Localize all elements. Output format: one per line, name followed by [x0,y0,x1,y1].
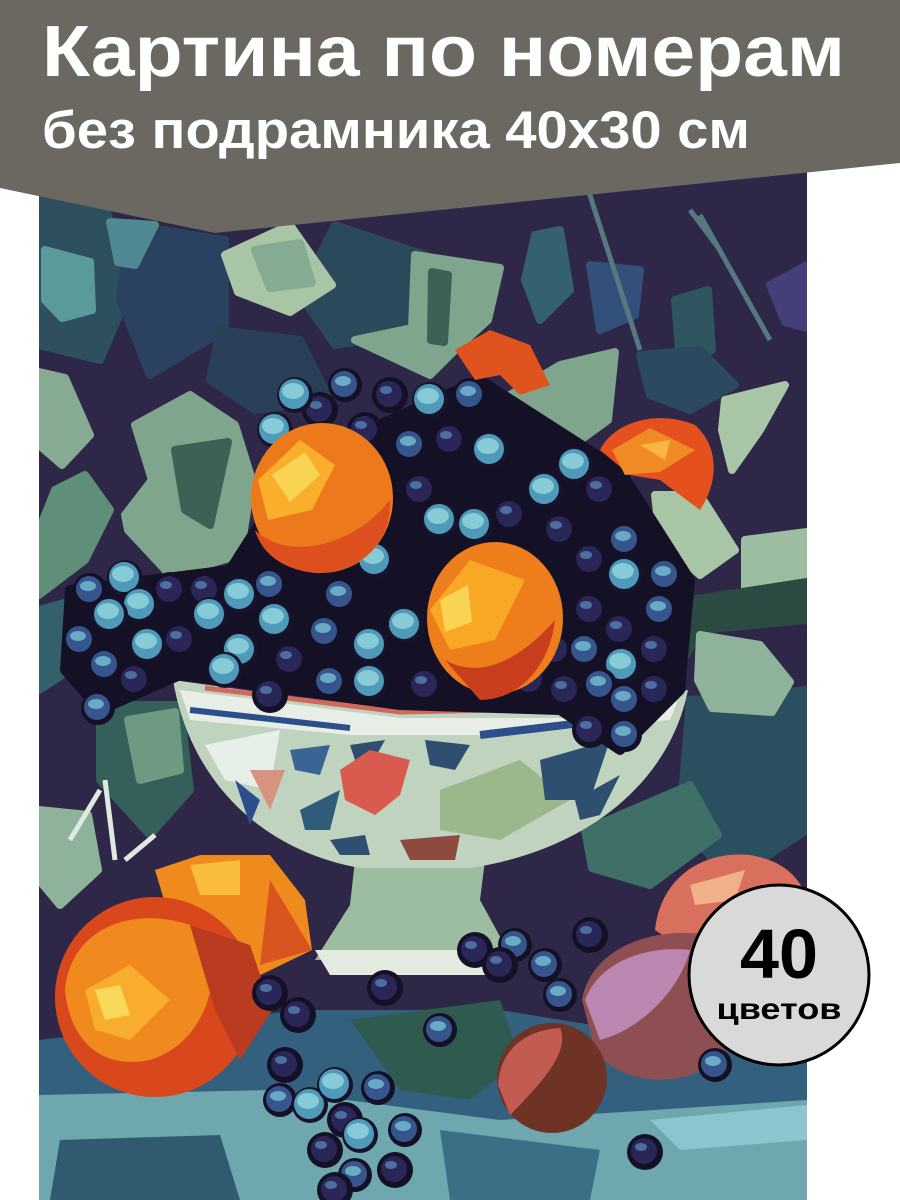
painting [39,170,807,1200]
leaves around the bowl [125,255,807,712]
header banner [0,0,900,233]
bowl foot [315,866,500,960]
peach: centre [427,542,563,700]
badge label: цветов [716,993,842,1026]
grape mass background [65,380,690,750]
blueberries in bowl [63,368,682,752]
plums and peach: bottom right [497,854,807,1133]
peaches: bottom left pair [55,855,312,1097]
painting background [39,172,807,1040]
bowl flower [340,750,410,815]
peach: top left [251,423,393,573]
background foliage [39,180,807,905]
wall and table [39,1000,807,1200]
bowl body [173,680,688,868]
loose grapes [252,917,732,1200]
badge number: 40 [740,915,818,993]
peach: upper small [455,330,550,395]
peach: top right [600,418,714,510]
subtitle: без подрамника 40х30 см [42,101,750,160]
title: Картина по номерам [42,12,845,92]
fruit bowl [173,680,688,975]
badge: 40 colours [689,885,869,1065]
